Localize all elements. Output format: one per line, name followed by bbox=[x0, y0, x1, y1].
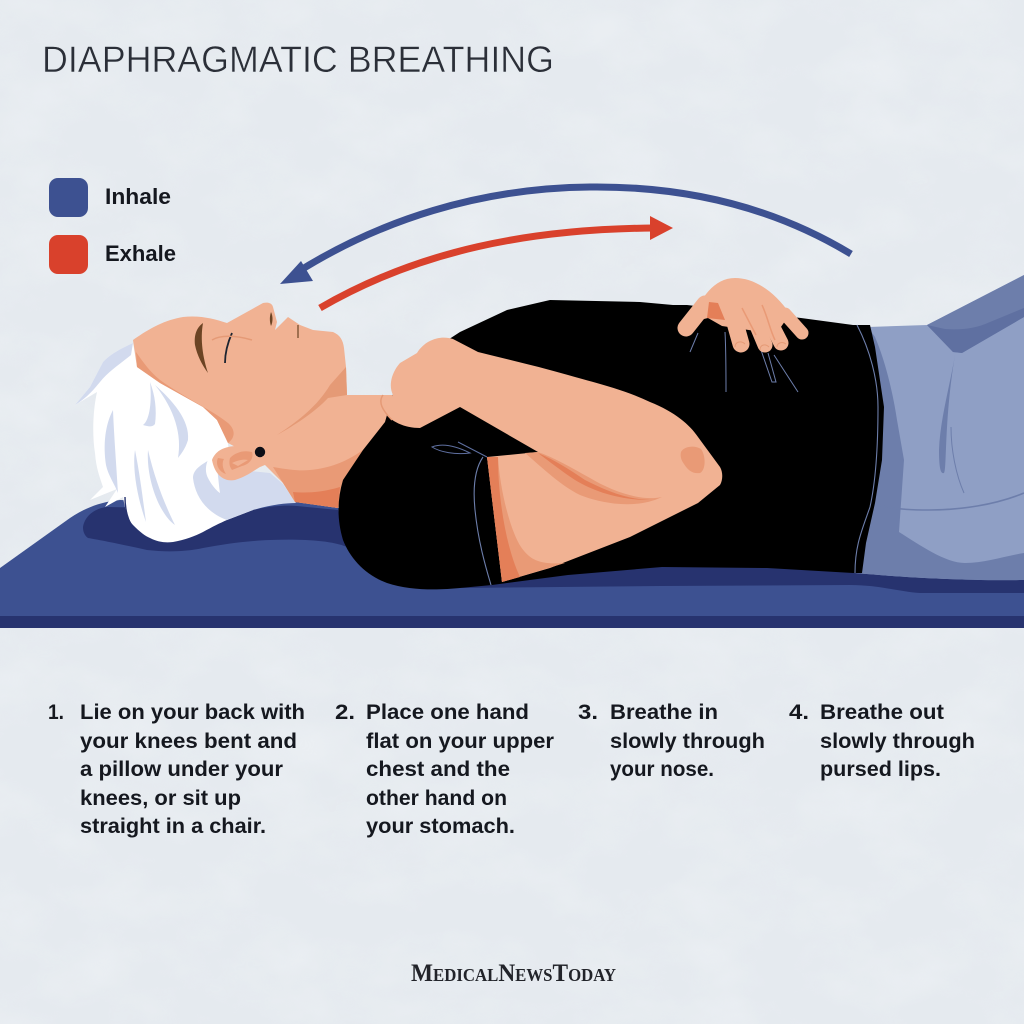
step 2: other hand on bbox=[366, 787, 507, 810]
step 4: pursed lips. bbox=[820, 758, 941, 781]
arrow: exhale bbox=[320, 216, 673, 308]
elbow crease bbox=[525, 452, 662, 504]
step 1: Lie on your back with bbox=[80, 701, 305, 724]
step 1: straight in a chair. bbox=[80, 815, 266, 838]
step 4: 4. bbox=[789, 701, 809, 724]
face and neck bbox=[133, 303, 395, 508]
legend: inhale label: Inhale bbox=[105, 184, 171, 209]
step 1: knees, or sit up bbox=[80, 787, 241, 810]
hand crease at neck bbox=[381, 395, 392, 420]
step 4: Breathe out bbox=[820, 701, 944, 724]
nostril bbox=[270, 312, 272, 326]
instructions bbox=[48, 701, 975, 838]
step 2: chest and the bbox=[366, 758, 510, 781]
step 3: slowly through bbox=[610, 730, 765, 753]
white hair bbox=[75, 343, 296, 542]
legend: exhale swatch bbox=[49, 235, 88, 274]
legend: inhale swatch bbox=[49, 178, 88, 217]
upper arm shadow bbox=[487, 457, 565, 582]
step 4: slowly through bbox=[820, 730, 975, 753]
legend bbox=[49, 178, 176, 274]
ear bbox=[212, 443, 274, 480]
step 2: your stomach. bbox=[366, 815, 515, 838]
shirt wrinkles bbox=[690, 332, 798, 392]
step 1: a pillow under your bbox=[80, 758, 283, 781]
sleeve hem line bbox=[474, 457, 491, 585]
hairline shadow bbox=[136, 352, 234, 443]
step 2 bbox=[335, 701, 554, 838]
folded arm bbox=[381, 338, 722, 582]
step 2: flat on your upper bbox=[366, 730, 554, 753]
step 1: your knees bent and bbox=[80, 730, 297, 753]
shirt waistband line bbox=[855, 325, 878, 573]
arrow: inhale bbox=[280, 187, 851, 284]
step 3: Breathe in bbox=[610, 701, 718, 724]
closed eye bbox=[225, 333, 232, 363]
logo: Medical News Today: MEDICALNEWSTODAY bbox=[411, 960, 616, 987]
yoga mat bbox=[0, 500, 1024, 628]
step 1: 1. bbox=[48, 701, 64, 724]
step 1 bbox=[48, 701, 305, 838]
step 3: your nose. bbox=[610, 758, 714, 781]
step 3 bbox=[578, 701, 765, 781]
eyebrow bbox=[195, 323, 208, 373]
title: DIAPHRAGMATIC BREATHING bbox=[42, 39, 554, 80]
pants bbox=[855, 275, 1024, 580]
hand on stomach bbox=[686, 278, 802, 350]
legend: exhale label: Exhale bbox=[105, 241, 176, 266]
elbow patch bbox=[681, 447, 705, 473]
step 2: Place one hand bbox=[366, 701, 529, 724]
black shirt bbox=[338, 300, 884, 589]
step 3: 3. bbox=[578, 701, 598, 724]
neck shadow bbox=[273, 440, 377, 508]
jaw shadow bbox=[277, 367, 347, 435]
earring bbox=[255, 447, 265, 457]
step 4 bbox=[789, 701, 975, 781]
mouth bbox=[297, 325, 299, 338]
illustration: person lying on mat bbox=[0, 275, 1024, 628]
step 2: 2. bbox=[335, 701, 355, 724]
